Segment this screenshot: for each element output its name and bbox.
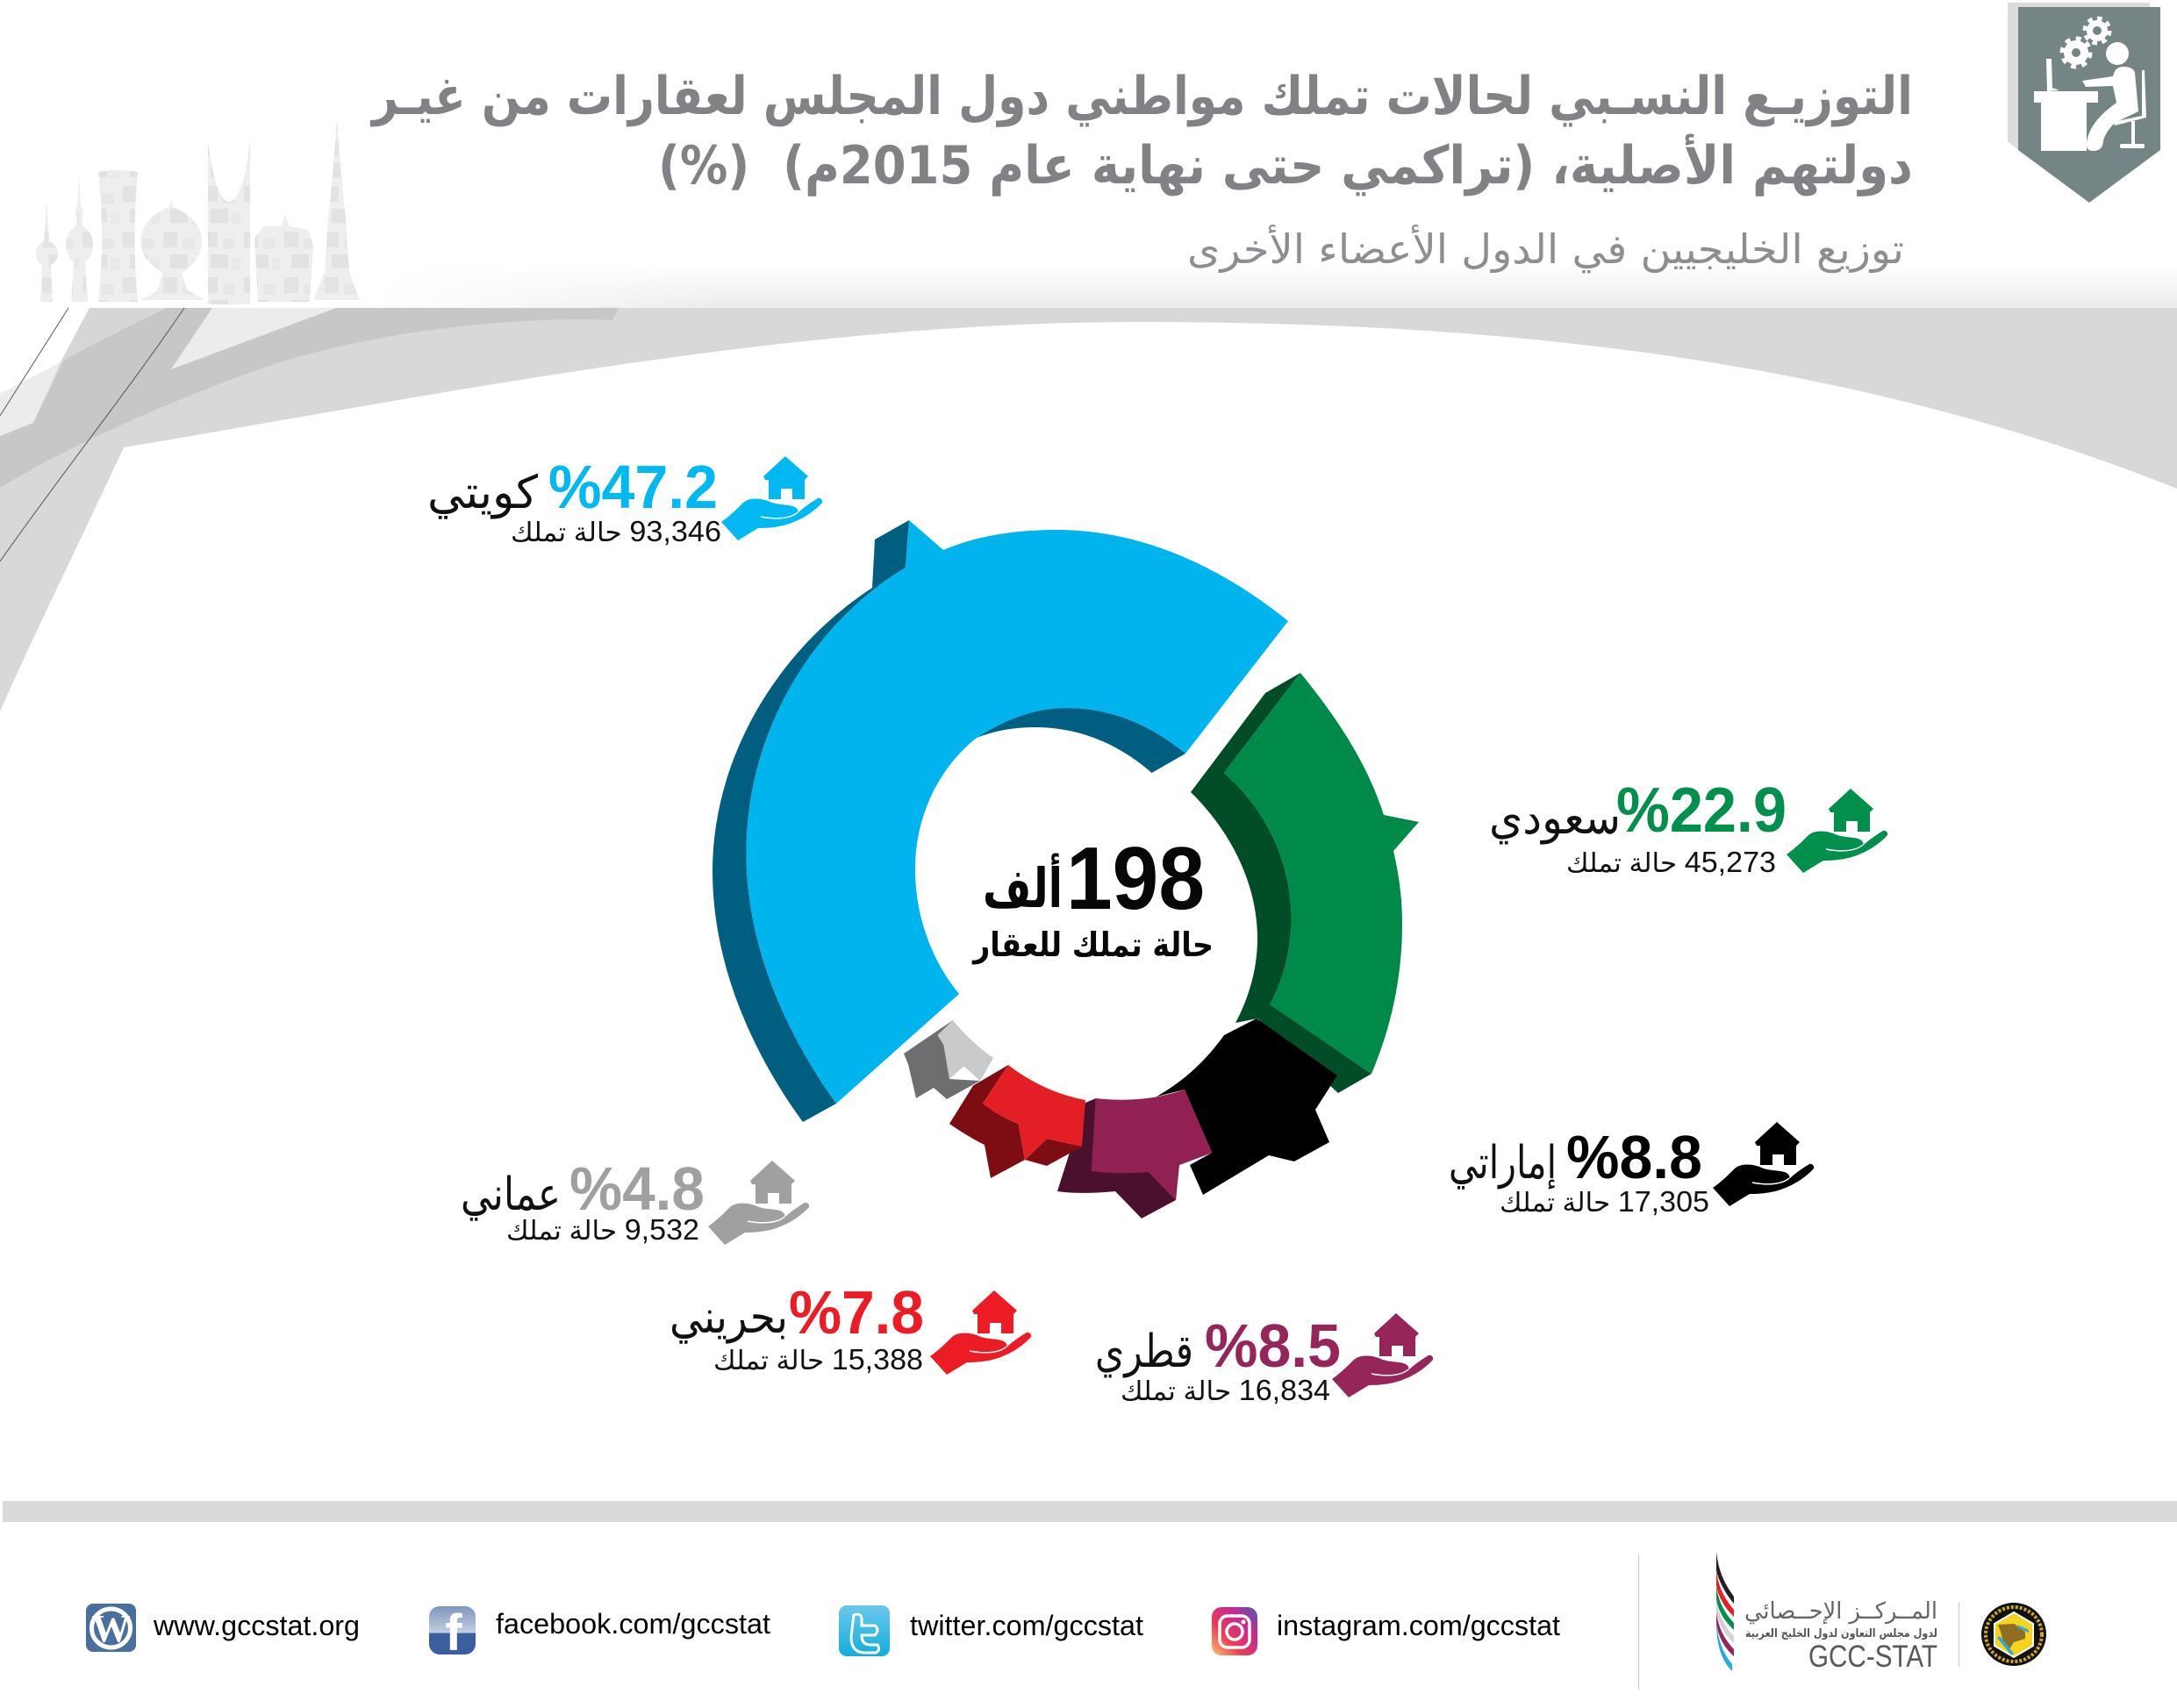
title: التوزيـع النسـبي لحالات تملك مواطني دول المجلس لعقارات من غيـر bbox=[369, 66, 1913, 127]
header gradient shadow bbox=[228, 260, 2177, 309]
label: Saudi: سعودي bbox=[1489, 792, 1621, 845]
instagram link: instagram.com/gccstat bbox=[1277, 1610, 1560, 1641]
GCC-STAT logo: لدول مجلس التعاون لدول الخليج العربية bbox=[1745, 1627, 1937, 1640]
label: UAE bbox=[1449, 1122, 1814, 1218]
label: Saudi bbox=[1489, 775, 1887, 878]
label: Bahrain: بحريني bbox=[670, 1291, 788, 1344]
icon: shield with person at desk bbox=[2008, 3, 2160, 203]
label: UAE: 17,305 حالة تملك bbox=[1500, 1185, 1709, 1218]
label: Bahrain bbox=[670, 1278, 1031, 1376]
label: Kuwait: كويتي bbox=[427, 467, 538, 519]
donut centre total bbox=[971, 830, 1214, 964]
segment: Oman bbox=[904, 1020, 993, 1099]
title bbox=[369, 66, 1913, 197]
donut centre total: ألف bbox=[983, 853, 1063, 920]
segment: Saudi bbox=[1191, 673, 1419, 1093]
facebook link: f bbox=[445, 1604, 462, 1662]
label: Bahrain: %7.8 bbox=[789, 1278, 924, 1347]
donut chart bbox=[713, 520, 1419, 1218]
website link: W bbox=[91, 1607, 130, 1650]
background swoosh bbox=[0, 308, 2177, 711]
title: دولتهم الأصلية، (تراكمي حتى نهاية عام 2015م) (%) bbox=[658, 133, 1913, 197]
label: Oman: %4.8 bbox=[569, 1154, 705, 1223]
logo ribbons bbox=[1716, 1551, 1734, 1671]
label: Qatar: 16,834 حالة تملك bbox=[1121, 1374, 1330, 1406]
label: UAE: %8.8 bbox=[1566, 1123, 1702, 1191]
label: UAE: إماراتي bbox=[1449, 1137, 1557, 1190]
footer divider bbox=[1638, 1554, 1639, 1690]
donut centre total: 198 bbox=[1066, 830, 1205, 928]
GCC emblem bbox=[1981, 1603, 2046, 1666]
GCC-STAT logo bbox=[1716, 1551, 1937, 1674]
label: Kuwait: 93,346 حالة تملك bbox=[511, 515, 721, 547]
label: Qatar: قطري bbox=[1095, 1326, 1193, 1378]
label: Oman: عماني bbox=[461, 1168, 561, 1221]
label: Saudi: 45,273 حالة تملك bbox=[1566, 846, 1776, 878]
segment: Bahrain bbox=[949, 1065, 1085, 1178]
website link bbox=[86, 1604, 360, 1652]
label: Oman: 9,532 حالة تملك bbox=[506, 1213, 699, 1246]
subtitle: توزيع الخليجيين في الدول الأعضاء الأخرى bbox=[1187, 224, 1904, 274]
label: Saudi: %22.9 bbox=[1616, 775, 1787, 846]
label: Bahrain: 15,388 حالة تملك bbox=[713, 1343, 923, 1376]
label: Qatar: %8.5 bbox=[1205, 1311, 1341, 1380]
label: Oman bbox=[461, 1154, 809, 1246]
instagram link bbox=[1212, 1607, 1560, 1655]
segment: Kuwait bbox=[713, 520, 1288, 1122]
segment: Qatar bbox=[1057, 1090, 1213, 1218]
twitter link: twitter.com/gccstat bbox=[910, 1610, 1143, 1641]
facebook link: facebook.com/gccstat bbox=[496, 1608, 770, 1640]
facebook link bbox=[429, 1604, 770, 1662]
GCC-STAT logo: GCC-STAT bbox=[1808, 1640, 1937, 1674]
footer bar bbox=[3, 1501, 2177, 1522]
donut centre total: حالة تملك للعقار bbox=[971, 925, 1214, 964]
label: Kuwait: %47.2 bbox=[548, 453, 718, 521]
label: Kuwait bbox=[427, 453, 822, 547]
label: Qatar bbox=[1095, 1311, 1433, 1406]
GCC-STAT logo: المــركــز الإحــصائي bbox=[1744, 1598, 1937, 1625]
segment: UAE bbox=[1157, 1018, 1337, 1195]
twitter link bbox=[839, 1605, 1143, 1656]
skyline silhouette bbox=[36, 120, 360, 304]
website link: www.gccstat.org bbox=[153, 1610, 360, 1641]
